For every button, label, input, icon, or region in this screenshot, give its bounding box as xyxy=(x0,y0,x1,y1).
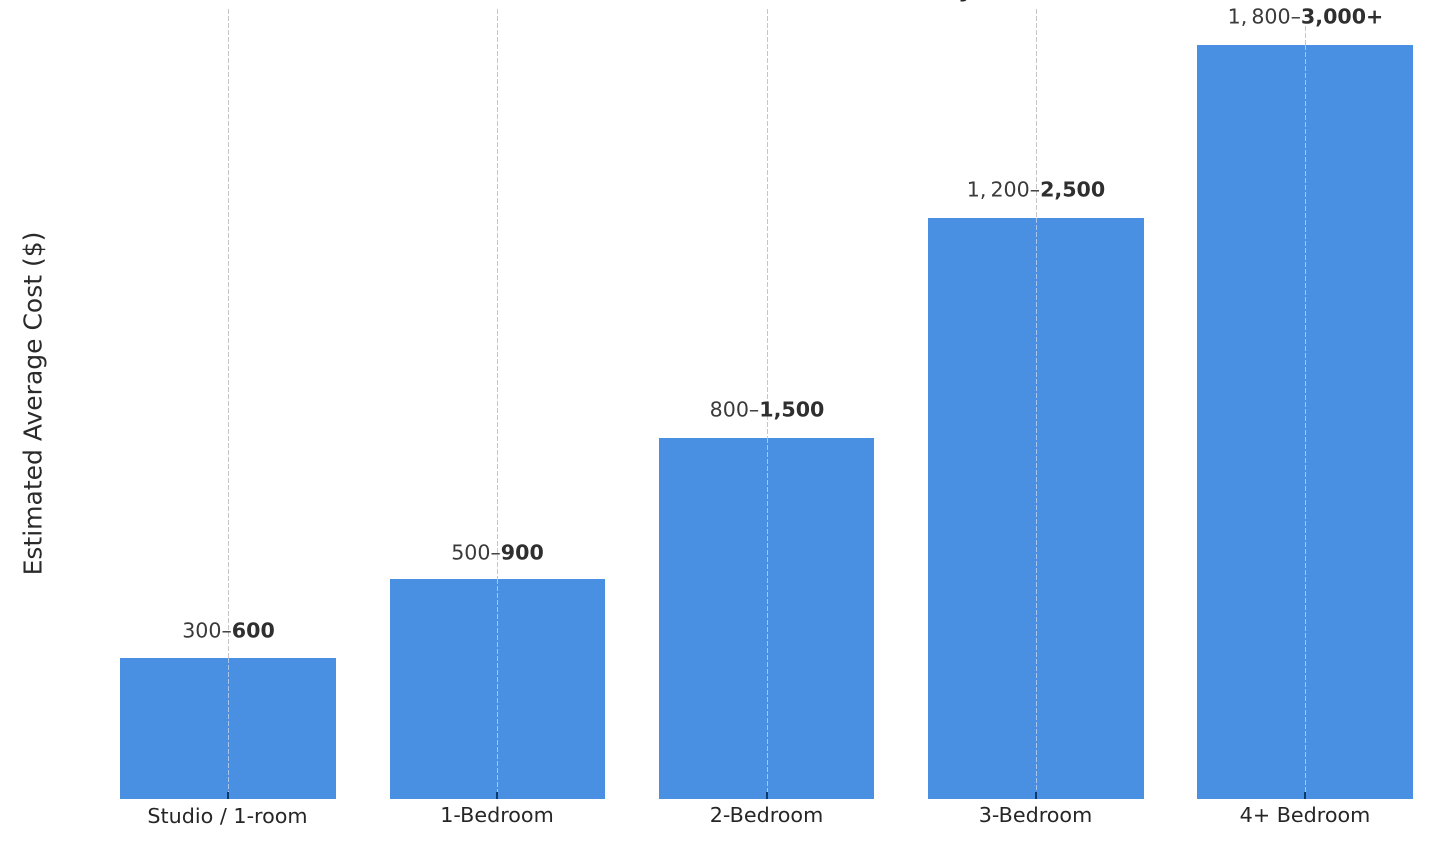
bar group: 1-Bedroom: 1-Bedroom xyxy=(440,803,554,827)
bar group: 3-Bedroom: 3-Bedroom xyxy=(979,803,1092,827)
bar group: 2-Bedroom xyxy=(659,9,874,827)
bar group: 1-Bedroom: 500–900 xyxy=(451,540,544,564)
bar group: 2-Bedroom: 800–1,500 xyxy=(710,398,824,422)
bar group: Studio / 1-room: 300–600 xyxy=(182,618,275,642)
bar group: 1-Bedroom xyxy=(390,9,605,827)
y-axis label: Estimated Average Cost ($) xyxy=(18,232,48,575)
bar group: 2-Bedroom: 2-Bedroom xyxy=(710,803,823,827)
bar group: 4+ Bedroom xyxy=(1197,4,1413,827)
bar group: 3-Bedroom xyxy=(928,9,1144,827)
bar group: Studio / 1-room: Studio / 1-room xyxy=(147,804,308,828)
bar group: 4+ Bedroom: 4+ Bedroom xyxy=(1240,803,1370,827)
bar group: 3-Bedroom: 1,200–2,500 xyxy=(967,178,1105,202)
bar group: Studio / 1-room xyxy=(120,9,336,828)
bar group: 4+ Bedroom: 1,800–3,000+ xyxy=(1228,4,1383,28)
